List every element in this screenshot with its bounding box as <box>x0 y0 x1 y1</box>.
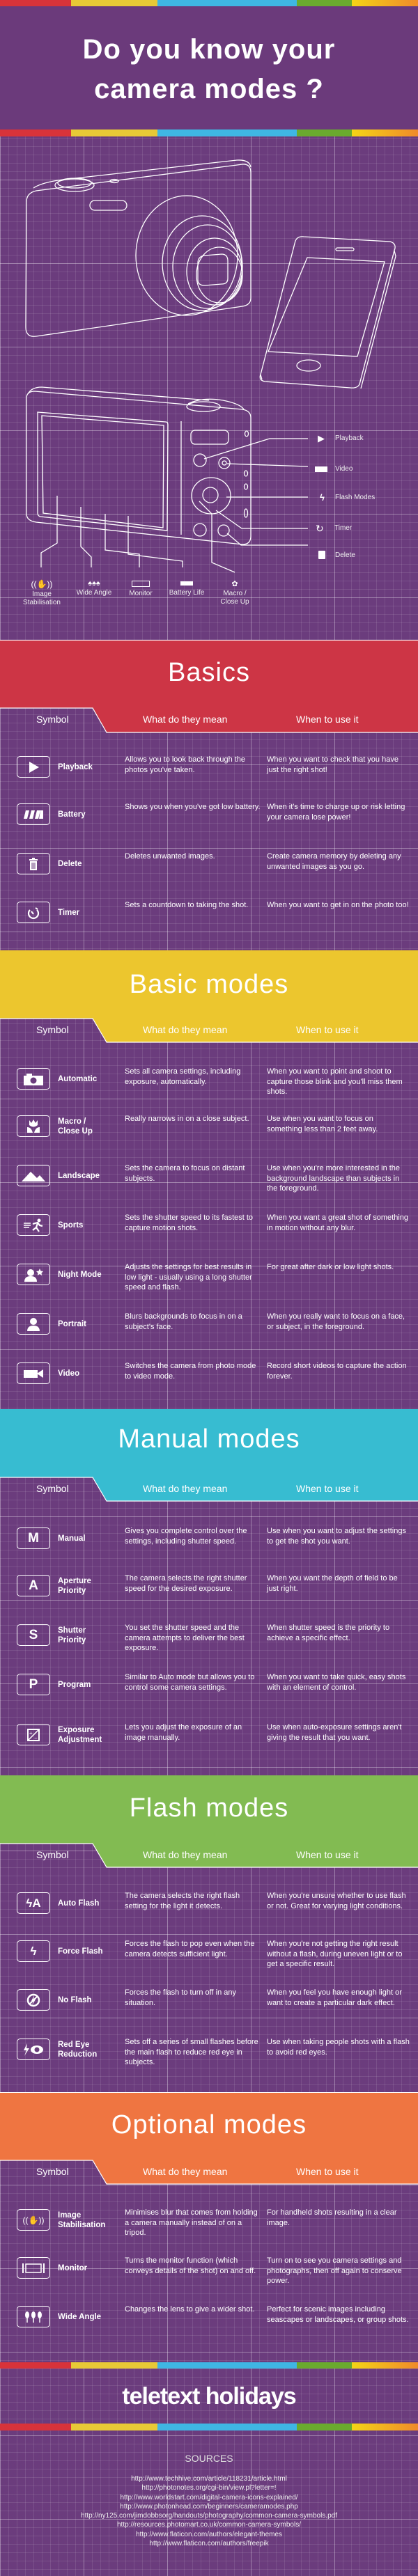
row: macro: Close Up <box>58 1126 93 1135</box>
right-side legend: playback: ▶ <box>318 433 325 443</box>
row: exposure adjustment: + <box>29 1729 33 1736</box>
row: aperture priority: The camera selects the right shutter speed for the desired exposure. <box>125 1574 247 1593</box>
bottom legend: wide angle: Wide Angle <box>77 589 111 597</box>
row: program: When you want to take quick, easy shots with an element of control. <box>267 1673 405 1692</box>
sources heading: SOURCES <box>185 2453 233 2464</box>
row: image stabilisation: Minimises blur that comes from holding a camera manually instead of on a tripod. <box>125 2208 258 2237</box>
row: image stabilisation: Stabilisation <box>58 2221 105 2229</box>
row: auto flash <box>0 1892 418 1913</box>
row: sports: When you want a great shot of something in motion without any blur. <box>267 1214 408 1232</box>
header labels: When to use it <box>296 2166 358 2177</box>
row: video: Switches the camera from photo mode to video mode. <box>125 1362 256 1380</box>
row: exposure adjustment: Lets you adjust the exposure of an image manually. <box>125 1723 242 1742</box>
sources list: http://www.worldstart.com/digital-camera-icons-explained/ <box>120 2494 298 2502</box>
row: program: Similar to Auto mode but allows you to control some camera settings. <box>125 1673 254 1692</box>
row: monitor <box>0 2257 418 2278</box>
row: force flash <box>0 1940 418 1961</box>
section: basic modes <box>0 950 418 1384</box>
right-side legend: timer: ↻ <box>316 523 324 534</box>
flash title: Flash modes <box>130 1793 288 1823</box>
bottom legend: image stabilisation: Stabilisation <box>23 599 61 606</box>
row: video: Video <box>58 1369 79 1377</box>
row: force flash: When you're not getting the right result without a flash, during uneven light or to get a specific result. <box>267 1940 402 1968</box>
section: manual modes <box>0 1409 418 1745</box>
row: delete: Delete <box>58 859 82 867</box>
basic modes header band <box>0 950 418 1043</box>
right-side legend: flash modes <box>320 492 375 503</box>
row: manual: Manual <box>58 1534 86 1543</box>
bottom legend: image stabilisation <box>23 579 61 606</box>
row: shutter priority: Shutter <box>58 1626 86 1635</box>
bottom legend: wide angle <box>77 579 111 597</box>
row: aperture priority: Aperture <box>58 1576 91 1585</box>
row: auto flash: Auto Flash <box>58 1899 99 1908</box>
row: night mode: Adjusts the settings for best results in low light - usually using a long shutter speed and flash. <box>125 1263 252 1291</box>
header labels <box>0 2166 418 2180</box>
row: exposure adjustment: Adjustment <box>58 1735 102 1743</box>
right-side legend: playback: Playback <box>335 434 364 442</box>
header labels <box>36 1024 358 1035</box>
row: video: Record short videos to capture the action forever. <box>267 1362 407 1380</box>
header labels: What do they mean <box>143 714 227 725</box>
row: exposure adjustment: Use when auto-exposure settings aren't giving the result that you want. <box>267 1723 401 1742</box>
sources list: http://www.photonhead.com/beginners/cameramodes.php <box>120 2503 298 2511</box>
row: manual: Use when you want to adjust the settings to get the shot you want. <box>267 1527 406 1546</box>
row: delete: Deletes unwanted images. <box>125 852 215 861</box>
row: monitor: Turn on to see you camera settings and photographs, then off again to conserve power. <box>267 2256 402 2285</box>
row: aperture priority: Priority <box>58 1586 86 1594</box>
row: force flash: ϟ <box>31 1944 36 1958</box>
row: battery: When it's time to charge up or risk letting your camera lose power! <box>267 803 405 822</box>
row: image stabilisation: For handheld shots resulting in a clear image. <box>267 2208 397 2226</box>
sources list: http://www.flaticon.com/authors/elegant-themes <box>136 2531 282 2538</box>
header labels: Symbol <box>36 714 69 725</box>
row: image stabilisation: Image <box>58 2211 81 2220</box>
header labels: Symbol <box>36 1024 69 1035</box>
row: no flash: No Flash <box>58 1995 92 2004</box>
row: red eye reduction: Reduction <box>58 2050 97 2058</box>
row: image stabilisation: ((✋)) <box>23 2215 44 2225</box>
row: portrait: When you really want to focus on a face, or subject, in the foreground. <box>267 1312 405 1331</box>
sources list: http://ny125.com/jimdobbsorg/handouts/photography/common-camera-symbols.pdf <box>81 2512 337 2520</box>
basic modes title: Basic modes <box>130 970 288 999</box>
row: wide angle: Changes the lens to give a wider shot. <box>125 2305 255 2314</box>
row: force flash: Force Flash <box>58 1947 103 1955</box>
row: delete: Create camera memory by deleting any unwanted images as you go. <box>267 852 401 870</box>
row: battery: Battery <box>58 810 86 819</box>
basics header band <box>0 640 418 733</box>
row: shutter priority: You set the shutter speed and the camera attempts to deliver the best exposure. <box>125 1624 245 1652</box>
row: program <box>17 1673 405 1695</box>
row: landscape: Sets the camera to focus on distant subjects. <box>125 1164 245 1182</box>
bottom legend: monitor <box>129 581 153 597</box>
row: force flash: Forces the flash to pop even when the camera detects sufficient light. <box>125 1940 255 1958</box>
row: image stabilisation <box>0 2209 418 2230</box>
header labels: When to use it <box>296 1849 358 1860</box>
row: timer <box>17 901 409 923</box>
header labels: What do they mean <box>143 1024 227 1035</box>
row: night mode: For great after dark or low light shots. <box>267 1263 394 1271</box>
row: night mode <box>17 1263 394 1291</box>
section: flash modes <box>0 1775 418 2066</box>
header labels: Symbol <box>36 1483 69 1494</box>
row: automatic: Automatic <box>58 1075 97 1083</box>
row: playback: Playback <box>58 763 93 771</box>
manual header band <box>0 1409 418 1502</box>
bottom legend: macro close up <box>220 580 249 606</box>
row: aperture priority <box>17 1574 398 1596</box>
header labels: Symbol <box>36 1849 69 1860</box>
row: no flash: When you feel you have enough light or want to create a particular dark effect. <box>267 1988 402 2006</box>
optional header band <box>0 2092 418 2185</box>
sources list: http://www.techhive.com/article/118231/article.html <box>131 2475 287 2483</box>
row: exposure adjustment: − <box>34 1735 38 1741</box>
row: auto flash: When you're unsure whether to use flash or not. Great for varying light conditions. <box>267 1892 406 1910</box>
right-side legend: flash modes: Flash Modes <box>335 494 375 501</box>
title: camera modes ? <box>94 74 324 104</box>
row: red eye reduction <box>0 2039 418 2059</box>
row: playback: Allows you to look back through the photos you've taken. <box>125 755 245 774</box>
row: landscape: Landscape <box>58 1171 100 1179</box>
row: exposure adjustment: Exposure <box>58 1725 94 1734</box>
row: timer: Sets a countdown to taking the shot. <box>125 901 248 909</box>
row: manual: M <box>28 1530 39 1546</box>
header labels: Symbol <box>36 2166 69 2177</box>
section: basics <box>0 640 418 923</box>
row: battery <box>17 803 405 825</box>
row: aperture priority: When you want the depth of field to be just right. <box>267 1574 398 1593</box>
leader lines bottom <box>41 496 57 567</box>
sources list: http://photonotes.org/cgi-bin/view.pl?letter=! <box>141 2484 277 2492</box>
section: optional modes <box>0 2092 418 2364</box>
row: battery: Shows you when you've got low battery. <box>125 803 261 811</box>
row: sports: Sports <box>58 1221 83 1230</box>
title <box>83 34 335 104</box>
row: red eye reduction: Sets off a series of small flashes before the main flash to reduce red eye in subjects. <box>125 2038 258 2066</box>
basics title: Basics <box>168 658 250 687</box>
bottom legend: macro close up: Close Up <box>220 598 249 606</box>
optional title: Optional modes <box>111 2110 307 2139</box>
row: monitor: Turns the monitor function (which conveys details of the shot) on and off. <box>125 2256 256 2275</box>
header labels: What do they mean <box>143 2166 227 2177</box>
row: landscape <box>17 1164 400 1193</box>
row: shutter priority: When shutter speed is the priority to achieve a specific effect. <box>267 1624 389 1642</box>
right-side legend: video <box>315 465 353 473</box>
bottom legend: battery life <box>169 581 204 597</box>
row: portrait: Portrait <box>58 1320 86 1328</box>
row: macro: Macro / <box>58 1117 86 1125</box>
row: macro: Really narrows in on a close subject. <box>125 1115 249 1123</box>
row: playback: When you want to check that you have just the right shot! <box>267 755 398 774</box>
camera diagram <box>25 159 396 573</box>
right-side legend: timer: Timer <box>334 524 352 532</box>
row: timer: When you want to get in on the photo too! <box>267 901 409 909</box>
header labels: What do they mean <box>143 1849 227 1860</box>
teletext holidays logo: teletext holidays <box>122 2383 296 2410</box>
back camera drawing <box>26 387 308 572</box>
row: exposure adjustment <box>17 1723 401 1745</box>
row: shutter priority: S <box>29 1628 38 1642</box>
row: timer: Timer <box>58 908 79 916</box>
header labels: What do they mean <box>143 1483 227 1494</box>
row: no flash <box>0 1989 418 2010</box>
row: auto flash: ϟA <box>26 1896 41 1909</box>
smartphone drawing <box>260 237 396 388</box>
row: red eye reduction: Red Eye <box>58 2040 89 2048</box>
second rainbow strip <box>0 129 418 136</box>
header labels: When to use it <box>296 714 358 725</box>
row: night mode: Night Mode <box>58 1270 102 1278</box>
right-side legend: delete <box>318 551 355 559</box>
row: red eye reduction: Use when taking people shots with a flash to avoid red eyes. <box>267 2038 410 2057</box>
header labels: When to use it <box>296 1024 358 1035</box>
row: shutter priority <box>17 1624 389 1652</box>
bottom legend: wide angle: ♠♠♠ <box>88 579 100 588</box>
bottom legend: macro close up: Macro / <box>223 590 247 597</box>
bottom legend: macro close up: ✿ <box>231 580 238 588</box>
leader lines right <box>204 439 308 459</box>
row: program: Program <box>58 1681 91 1689</box>
row: playback <box>17 755 398 778</box>
footer rainbow strip 1 <box>0 2362 418 2369</box>
bottom legend: image stabilisation: Image <box>32 590 52 598</box>
bottom legend: monitor: Monitor <box>129 590 153 597</box>
right-side legend: flash modes: ϟ <box>320 492 325 503</box>
row: wide angle: Wide Angle <box>58 2313 101 2321</box>
row: macro: Use when you want to focus on something less than 2 feet away. <box>267 1115 378 1133</box>
bottom legend: battery life: Battery Life <box>169 589 204 597</box>
row: wide angle <box>0 2306 418 2327</box>
right-side legend: playback <box>318 433 364 443</box>
row: sports: Sets the shutter speed to its fastest to capture motion shots. <box>125 1214 253 1232</box>
top rainbow strip <box>0 0 418 6</box>
row: monitor: Monitor <box>58 2264 87 2272</box>
row: macro <box>17 1115 378 1137</box>
row: manual: Gives you complete control over the settings, including shutter speed. <box>125 1527 247 1546</box>
row: delete <box>17 852 401 874</box>
row: auto flash: The camera selects the right flash setting for the light it detects. <box>125 1892 240 1910</box>
row: landscape: Use when you're more interested in the background landscape than subjects in the foreground. <box>267 1164 400 1193</box>
header labels <box>0 1849 418 1863</box>
sources list: http://www.flaticon.com/authors/freepik <box>149 2540 269 2547</box>
row: sports <box>17 1214 408 1236</box>
row: video <box>17 1362 407 1384</box>
right-side legend: timer <box>316 523 353 534</box>
row: automatic: Sets all camera settings, including exposure, automatically. <box>125 1067 240 1086</box>
sources list: http://resources.photomart.co.uk/common-camera-symbols/ <box>117 2521 301 2529</box>
row: aperture priority: A <box>29 1578 38 1593</box>
header labels <box>36 1483 358 1494</box>
row: automatic: When you want to point and shoot to capture those blink and you'll miss them shots. <box>267 1067 403 1096</box>
row: wide angle: Perfect for scenic images including seascapes or landscapes, or group shots. <box>267 2305 409 2324</box>
row: no flash: Forces the flash to turn off in any situation. <box>125 1988 236 2006</box>
flash header band <box>0 1775 418 1869</box>
title banner <box>0 6 418 129</box>
row: shutter priority: Priority <box>58 1636 86 1644</box>
right-side legend: delete: Delete <box>335 551 355 559</box>
header labels: When to use it <box>296 1483 358 1494</box>
row: program: P <box>29 1676 38 1692</box>
footer rainbow strip 2 <box>0 2424 418 2430</box>
front camera drawing <box>26 160 251 336</box>
manual title: Manual modes <box>118 1424 300 1454</box>
right-side legend: video: Video <box>335 465 353 473</box>
bottom legend: image stabilisation: ((✋)) <box>31 579 52 589</box>
header labels <box>36 714 358 725</box>
row: portrait <box>17 1312 405 1335</box>
row: manual <box>17 1527 406 1549</box>
title: Do you know your <box>83 34 335 65</box>
sources list <box>0 2474 418 2548</box>
row: automatic <box>17 1067 403 1096</box>
row: portrait: Blurs backgrounds to focus in on a subject's face. <box>125 1312 242 1331</box>
